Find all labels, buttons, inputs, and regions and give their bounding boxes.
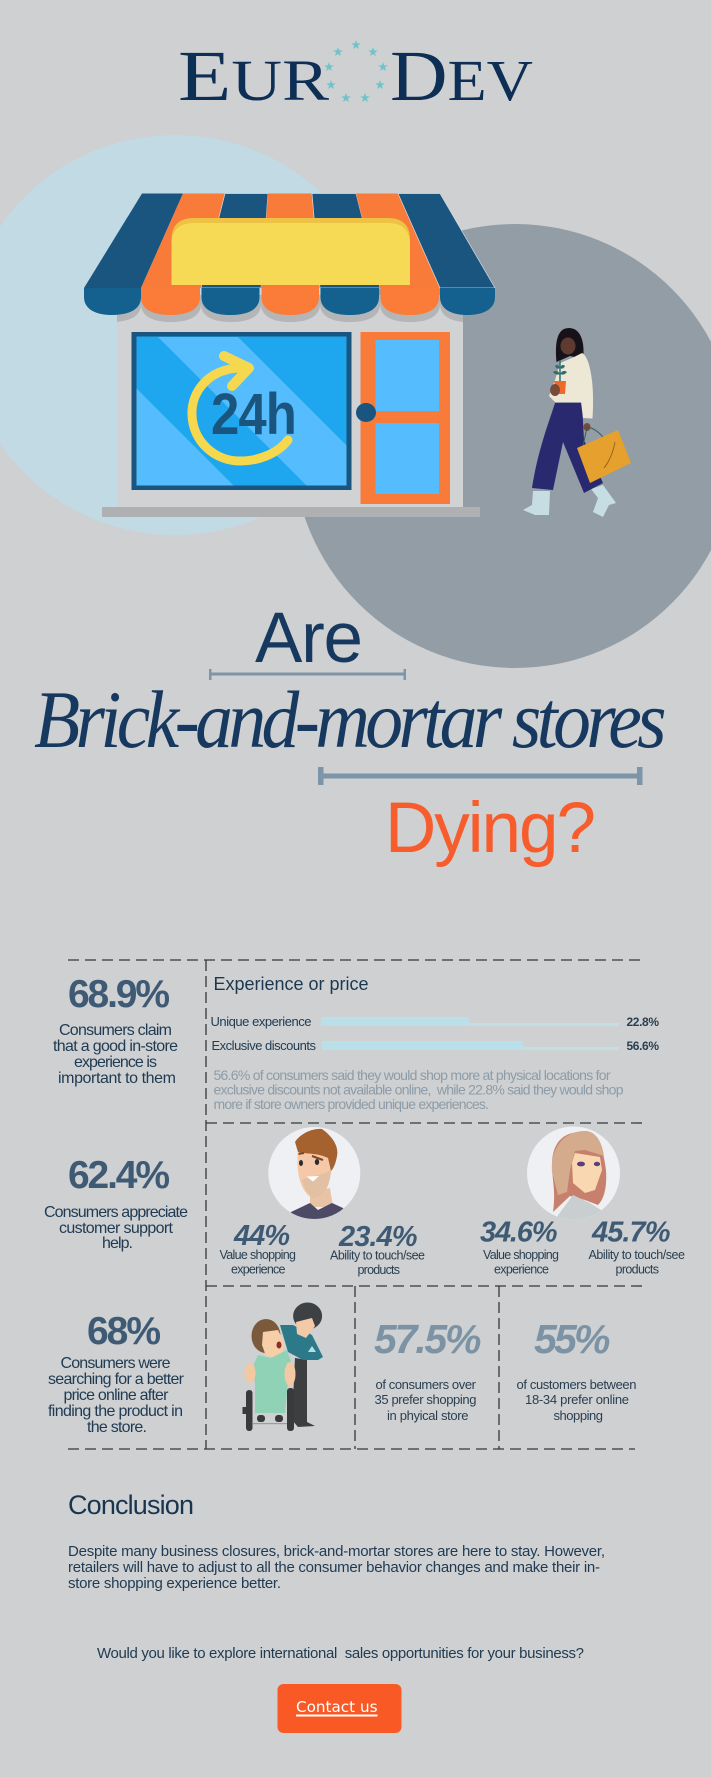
stat: 57.5% over 35 prefer store: 57.5% [374,1316,482,1362]
face [572,1153,602,1193]
icon: wheelchair user with carer [242,1302,323,1431]
stat: 62.4% customer support: 62.4% [68,1154,170,1197]
scallop shadow [117,295,463,322]
store sign [172,218,410,285]
icon: woman avatar [527,1126,620,1222]
bar chart: exclusive discounts: Exclusive discounts [212,1038,316,1053]
panel: experience or price [210,974,659,1112]
beard [302,1170,331,1198]
bar chart: unique experience [210,1014,659,1029]
text: conclusion paragraph: store shopping experience better. [68,1575,281,1592]
title: Dying?: Dying? [385,789,596,868]
stat: 68% searching for better price: Consumers were [60,1355,171,1372]
stat: 55% 18-34 prefer online: shopping [554,1408,603,1423]
carer sweater [280,1325,323,1360]
stat: 62.4% customer support: Consumers appreciate [44,1204,188,1221]
text: conclusion paragraph [68,1543,605,1592]
heading: Conclusion: Conclusion [68,1490,194,1520]
illustration: 24h store [84,194,495,517]
stat: 34.6% value shopping experience: Value shopping [483,1248,559,1262]
plant in pot [550,360,567,396]
stat: 57.5% over 35 prefer store [374,1316,482,1423]
button: Contact us [278,1684,402,1733]
logo word: Dev: DEV [390,36,533,116]
bar chart: unique experience: Unique experience [210,1014,312,1029]
shop door [356,332,450,504]
face [560,338,576,354]
text: conclusion paragraph: retailers will have to adjust to all the consumer behavior changes and make their in- [68,1559,600,1576]
stat: 68.9% in-store experience: 68.9% [68,973,170,1016]
eyes [577,1162,585,1166]
stats: men [220,1220,425,1277]
shopping bag [577,423,631,483]
stat: 23.4% ability to touch: 23.4% [338,1221,418,1253]
patient head [252,1319,285,1358]
trousers [532,403,603,493]
sweater [549,353,593,418]
shop window [132,332,352,490]
stat: 44% value shopping experience: Value shopping [220,1248,296,1262]
stat: 62.4% customer support: help. [102,1235,133,1252]
stat: 62.4% customer support: customer support [59,1220,174,1237]
stat: 68.9% in-store experience: experience is [74,1054,157,1071]
logo: EuroDev [178,36,533,116]
stat: 55% 18-34 prefer online: 55% [534,1316,610,1362]
stat: 23.4% ability to touch [330,1221,425,1277]
bar chart: unique experience: 22.8% [626,1015,659,1029]
stat: 57.5% over 35 prefer store: in phyical store [387,1408,468,1423]
carer head [293,1302,322,1338]
hair [295,1129,337,1171]
background circle: light blue [0,135,383,535]
stat: 44% value shopping experience: 44% [233,1220,290,1252]
stat: 68.9% in-store experience: that a good in-store [53,1038,178,1055]
stat: 45.7% ability to touch: 45.7% [591,1216,670,1248]
stat: 62.4% customer support [44,1154,188,1252]
stat: 44% value shopping experience: experience [231,1262,286,1276]
patient arms [244,1362,296,1386]
conclusion [68,1490,605,1592]
stat: 68.9% in-store experience: Consumers claim [59,1022,172,1039]
title [34,599,665,868]
stat: 34.6% value shopping experience: 34.6% [480,1216,558,1248]
boots [523,491,550,515]
text: explanation paragraph: 56.6% of consumers said they would shop more at physical locations for [214,1067,611,1083]
stat: 68% searching for better price: the store. [87,1419,147,1436]
stat: 45.7% ability to touch [588,1216,685,1276]
stat: 68% searching for better price: searching for a better [48,1371,185,1388]
divider bar under Are [209,669,406,680]
text: explanation paragraph: more if store owners provided unique experiences. [214,1096,489,1112]
stat: 57.5% over 35 prefer store: of consumers over [376,1377,477,1392]
stat: 68.9% in-store experience: important to them [58,1070,176,1087]
stat: 68% searching for better price [48,1310,185,1436]
store wall [117,300,463,507]
icon: man avatar [268,1127,360,1222]
stat: 55% 18-34 prefer online: 18-34 prefer online [525,1392,629,1407]
text: conclusion paragraph: Despite many business closures, brick-and-mortar stores are here to stay. However, [68,1543,605,1560]
background circle: slate grey [293,224,711,668]
text: explanation paragraph: exclusive discounts not available online, while 22.8% said they would shop [214,1082,624,1098]
stat: 57.5% over 35 prefer store: 35 prefer shopping [374,1392,476,1407]
stat: 23.4% ability to touch: Ability to touch/see [330,1248,425,1262]
face [297,1150,332,1198]
text: call to action question: Would you like to explore international sales opportunities for your business? [97,1645,584,1662]
bar chart: exclusive discounts: 56.6% [626,1039,659,1053]
bar chart: exclusive discounts [212,1038,659,1053]
awning stripes [84,194,495,288]
patient dress [252,1350,292,1413]
eyes and smile [298,1153,323,1160]
stat: 34.6% value shopping experience [480,1216,559,1276]
stat: 34.6% value shopping experience: experience [494,1262,549,1276]
text: explanation paragraph [214,1067,624,1112]
stat: 55% 18-34 prefer online: of customers between [516,1377,636,1392]
title: Are: Are [255,599,363,678]
top [557,1195,601,1220]
stat: 68.9% in-store experience [53,973,178,1087]
stat: 68% searching for better price: 68% [87,1310,161,1353]
stat: 55% 18-34 prefer online [516,1316,636,1423]
carer legs [292,1358,315,1427]
stats: women [480,1216,685,1276]
back hair [552,1132,606,1212]
dashed grid [68,960,642,1449]
awning scallops [84,288,495,315]
logo stars [324,40,388,102]
store base [102,507,480,517]
illustration: woman with shopping bag [523,328,631,517]
stat: 44% value shopping experience [220,1220,296,1276]
text: 24h: 24h [211,382,296,447]
title: Brick-and-mortar stores: Brick-and-mortar stores [34,674,665,765]
front hair [552,1131,604,1195]
logo word: Eur: EUR [178,36,329,116]
divider bar above Dying [318,767,642,785]
stat: 45.7% ability to touch: products [616,1262,659,1276]
heading: Experience or price: Experience or price [214,974,368,994]
hair [556,328,584,362]
stat: 45.7% ability to touch: Ability to touch/see [588,1248,685,1262]
neck [310,1188,333,1207]
stat: 68% searching for better price: finding the product in [48,1403,183,1420]
stat: 23.4% ability to touch: products [358,1263,400,1277]
icon: circular yellow arrow [192,356,288,461]
button: Contact us: Contact us [296,1698,378,1716]
shirt [290,1203,344,1219]
stat: 68% searching for better price: price online after [64,1387,169,1404]
wheelchair [242,1388,294,1431]
